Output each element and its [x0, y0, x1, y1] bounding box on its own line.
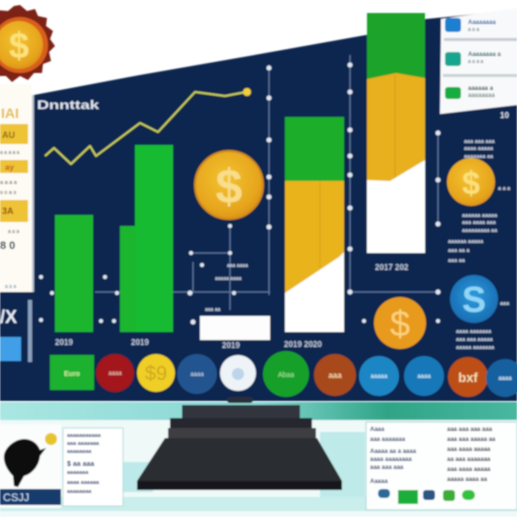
panel: top right legend: Aaaaaaaa a: [468, 52, 501, 58]
icon: blue coin: S: [462, 279, 486, 320]
panel: notes card: aaa aaaaaaa: [370, 437, 406, 443]
bar chart: stacked bar 3: [285, 117, 344, 332]
token: orange: bxf: [458, 370, 478, 385]
panel: left sidebar: 3A: [2, 206, 14, 216]
text block: coin notes upper: aaaaaaa aa: [464, 154, 494, 160]
text block: coin notes upper: aaaaaaaaa aa: [462, 228, 498, 234]
text block: mid chart note: aaa aa: [205, 307, 221, 313]
icon: orange coin: [374, 297, 426, 349]
line chart: yellow trend: [45, 88, 251, 164]
text block: coin notes upper: aaa aa: [448, 258, 466, 264]
token: blue 4: aaaa: [498, 376, 512, 382]
token: blue 4: [486, 359, 517, 397]
panel: left sidebar: s o a s: [0, 190, 16, 196]
bar chart: green bar 1: [55, 215, 93, 332]
text block: coin notes upper: aaa aaa aaa: [464, 139, 496, 145]
panel: top right legend: aaaaaa a: [468, 86, 494, 92]
text block: coin notes upper: aaa aaaa aaa: [462, 220, 497, 226]
panel: left sidebar: a a a: [5, 284, 16, 290]
axis: dotted guide lines: [39, 55, 440, 324]
panel: bull card text: aaaaaaaa: [67, 449, 92, 455]
panel: notes card: aaa aaa aaaaa aa: [447, 437, 496, 443]
panel: left sidebar: a a a a: [0, 180, 18, 186]
text block: coin notes upper: aaaaaa aaaaa: [462, 213, 498, 219]
text block: coin notes lower: aaaaa aaaaaaa: [456, 345, 495, 351]
text block: coin notes upper: aaa aa a: [448, 248, 470, 254]
labels: bar axis labels: 2019: [222, 341, 240, 350]
panel: white placeholder box: [200, 316, 270, 340]
token: blue 2: aaaaa: [371, 374, 388, 380]
text block: mid chart note: aaaaa aaaa: [215, 276, 242, 282]
icon: blue coin: [450, 275, 498, 323]
text block: coin notes lower: aaa aaa aaaaa: [456, 337, 494, 343]
panel: notes card: aaa aaa aaa aaa: [447, 427, 493, 433]
panel: bull card text: aaaaaaaa: [67, 489, 92, 495]
token: blue 3: aaaa: [417, 374, 431, 380]
token: orange: [448, 357, 488, 397]
panel: bull card text: aaaaaaaaaaa: [67, 433, 102, 439]
panel: top right legend: a a a: [468, 27, 479, 33]
token: green square: Euro: [64, 371, 80, 378]
panel: notes card: aaaaa aaaa aa: [447, 477, 488, 483]
panel: notes card: aaaa aaaaaaaa: [370, 457, 412, 463]
text block: coin notes upper: aaaa aaaaa: [464, 146, 494, 152]
panel: top right legend: a a a a: [468, 59, 484, 65]
panel: bull card: [0, 424, 61, 508]
token: yellow: $9: [145, 363, 167, 385]
icon: green legend mark: [445, 87, 461, 99]
text block: coin notes lower: aaa: [500, 301, 510, 307]
text block: coin notes lower: [456, 301, 510, 351]
text block: coin notes upper: 10: [500, 111, 509, 120]
text block: mid chart note: aaa aaaa: [227, 263, 248, 269]
panel: top right legend: aaaaaaaa: [468, 93, 495, 99]
icons: notes badges: [378, 489, 475, 504]
panel: left sidebar: a a a: [8, 229, 19, 235]
panel: left sidebar: [0, 84, 34, 292]
icon: orange coin: $: [390, 303, 410, 344]
icon: small gold coin: [447, 158, 495, 206]
icon: bull silhouette: [4, 439, 46, 487]
panel: navy chart board: [0, 10, 517, 401]
text block: coin notes upper: aaaaaa aaaaa: [448, 239, 484, 245]
token: green square: [50, 355, 94, 390]
panel: notes card: aaa aaaa aaaaa: [447, 447, 491, 453]
panel: notes card: aaa aaa aaa: [370, 465, 404, 471]
labels: bar axis labels: 2019: [55, 338, 73, 347]
panel: notes card: Aaaaa aa a aaaa: [370, 449, 417, 455]
bar chart: green bar 2: [120, 145, 173, 332]
icon: large gold coin: $: [216, 161, 243, 214]
icon: small yellow coin: [45, 433, 57, 445]
panel: left sidebar lower blue: /X: [0, 307, 17, 327]
text block: mid chart note: [205, 263, 248, 313]
panel: bull card text: [63, 428, 123, 506]
labels: bar axis labels: 2019 2020: [284, 340, 322, 349]
bar chart: stacked bar 4: [367, 13, 425, 253]
token: white: [220, 355, 256, 391]
panel: left sidebar: a a a a a: [0, 150, 20, 156]
icon: sun coin: [0, 5, 55, 82]
icon: small gold coin: $: [462, 165, 480, 201]
text block: coin notes lower: aaaa aaaaaaa: [456, 329, 492, 335]
token: yellow: [137, 354, 175, 392]
labels: bar axis labels: 2017 202: [375, 263, 409, 272]
panel: notes card: aaa aaaa aaaaa: [447, 467, 491, 473]
panel: lower teal band: [0, 402, 517, 517]
panel: bull card text: aaaa aaaaaa: [67, 480, 100, 486]
panel: bull card text: $ aa aaa: [67, 461, 94, 468]
panel: left sidebar lower blue: [0, 300, 32, 362]
text block: coin notes upper: a a a: [498, 186, 511, 192]
text block: coin notes upper: [448, 111, 511, 264]
icon: sun coin: $: [9, 25, 29, 66]
icon: podium: [137, 397, 342, 490]
icon: blue legend mark: [445, 18, 461, 32]
panel: left sidebar: AU: [2, 130, 15, 140]
panel: top right legend: [440, 8, 517, 114]
labels: bar axis labels: 2019: [131, 338, 149, 347]
token: red: aaaa: [108, 371, 122, 377]
panel: left sidebar: 8 0: [0, 240, 15, 252]
panel: left sidebar: ay: [5, 163, 14, 172]
row: token circles: [50, 351, 517, 397]
token: blue: [177, 354, 217, 394]
token: blue 3: [404, 356, 444, 396]
panel: notes card: Aaaaa: [370, 479, 388, 485]
icon: large gold coin: [195, 151, 263, 219]
token: brown: aaa: [328, 371, 342, 380]
label: bull card footer: CSJJ: [3, 492, 29, 504]
panel: notes card: aa aaa aaaaaaa: [447, 457, 491, 463]
panel: left sidebar: IAI: [1, 105, 19, 121]
token: green: Abaa: [278, 372, 294, 379]
icon: teal legend mark: [445, 52, 461, 66]
heading: chart title: Dnnttak: [37, 98, 99, 112]
token: brown: [314, 354, 356, 396]
panel: notes card: [366, 422, 517, 510]
labels: bar axis labels: [55, 263, 409, 350]
token: blue: aaaa: [190, 372, 204, 378]
panel: bull card text: aaa aaaaaaa: [67, 441, 100, 447]
panel: notes card: Aaaa: [370, 427, 385, 433]
token: red: [96, 354, 134, 392]
token: blue 2: [359, 356, 399, 396]
token: green: [263, 351, 309, 397]
panel: bull card text: aaaaaaa: [67, 470, 89, 476]
panel: top right legend: Aaaaaaaa: [468, 20, 496, 26]
